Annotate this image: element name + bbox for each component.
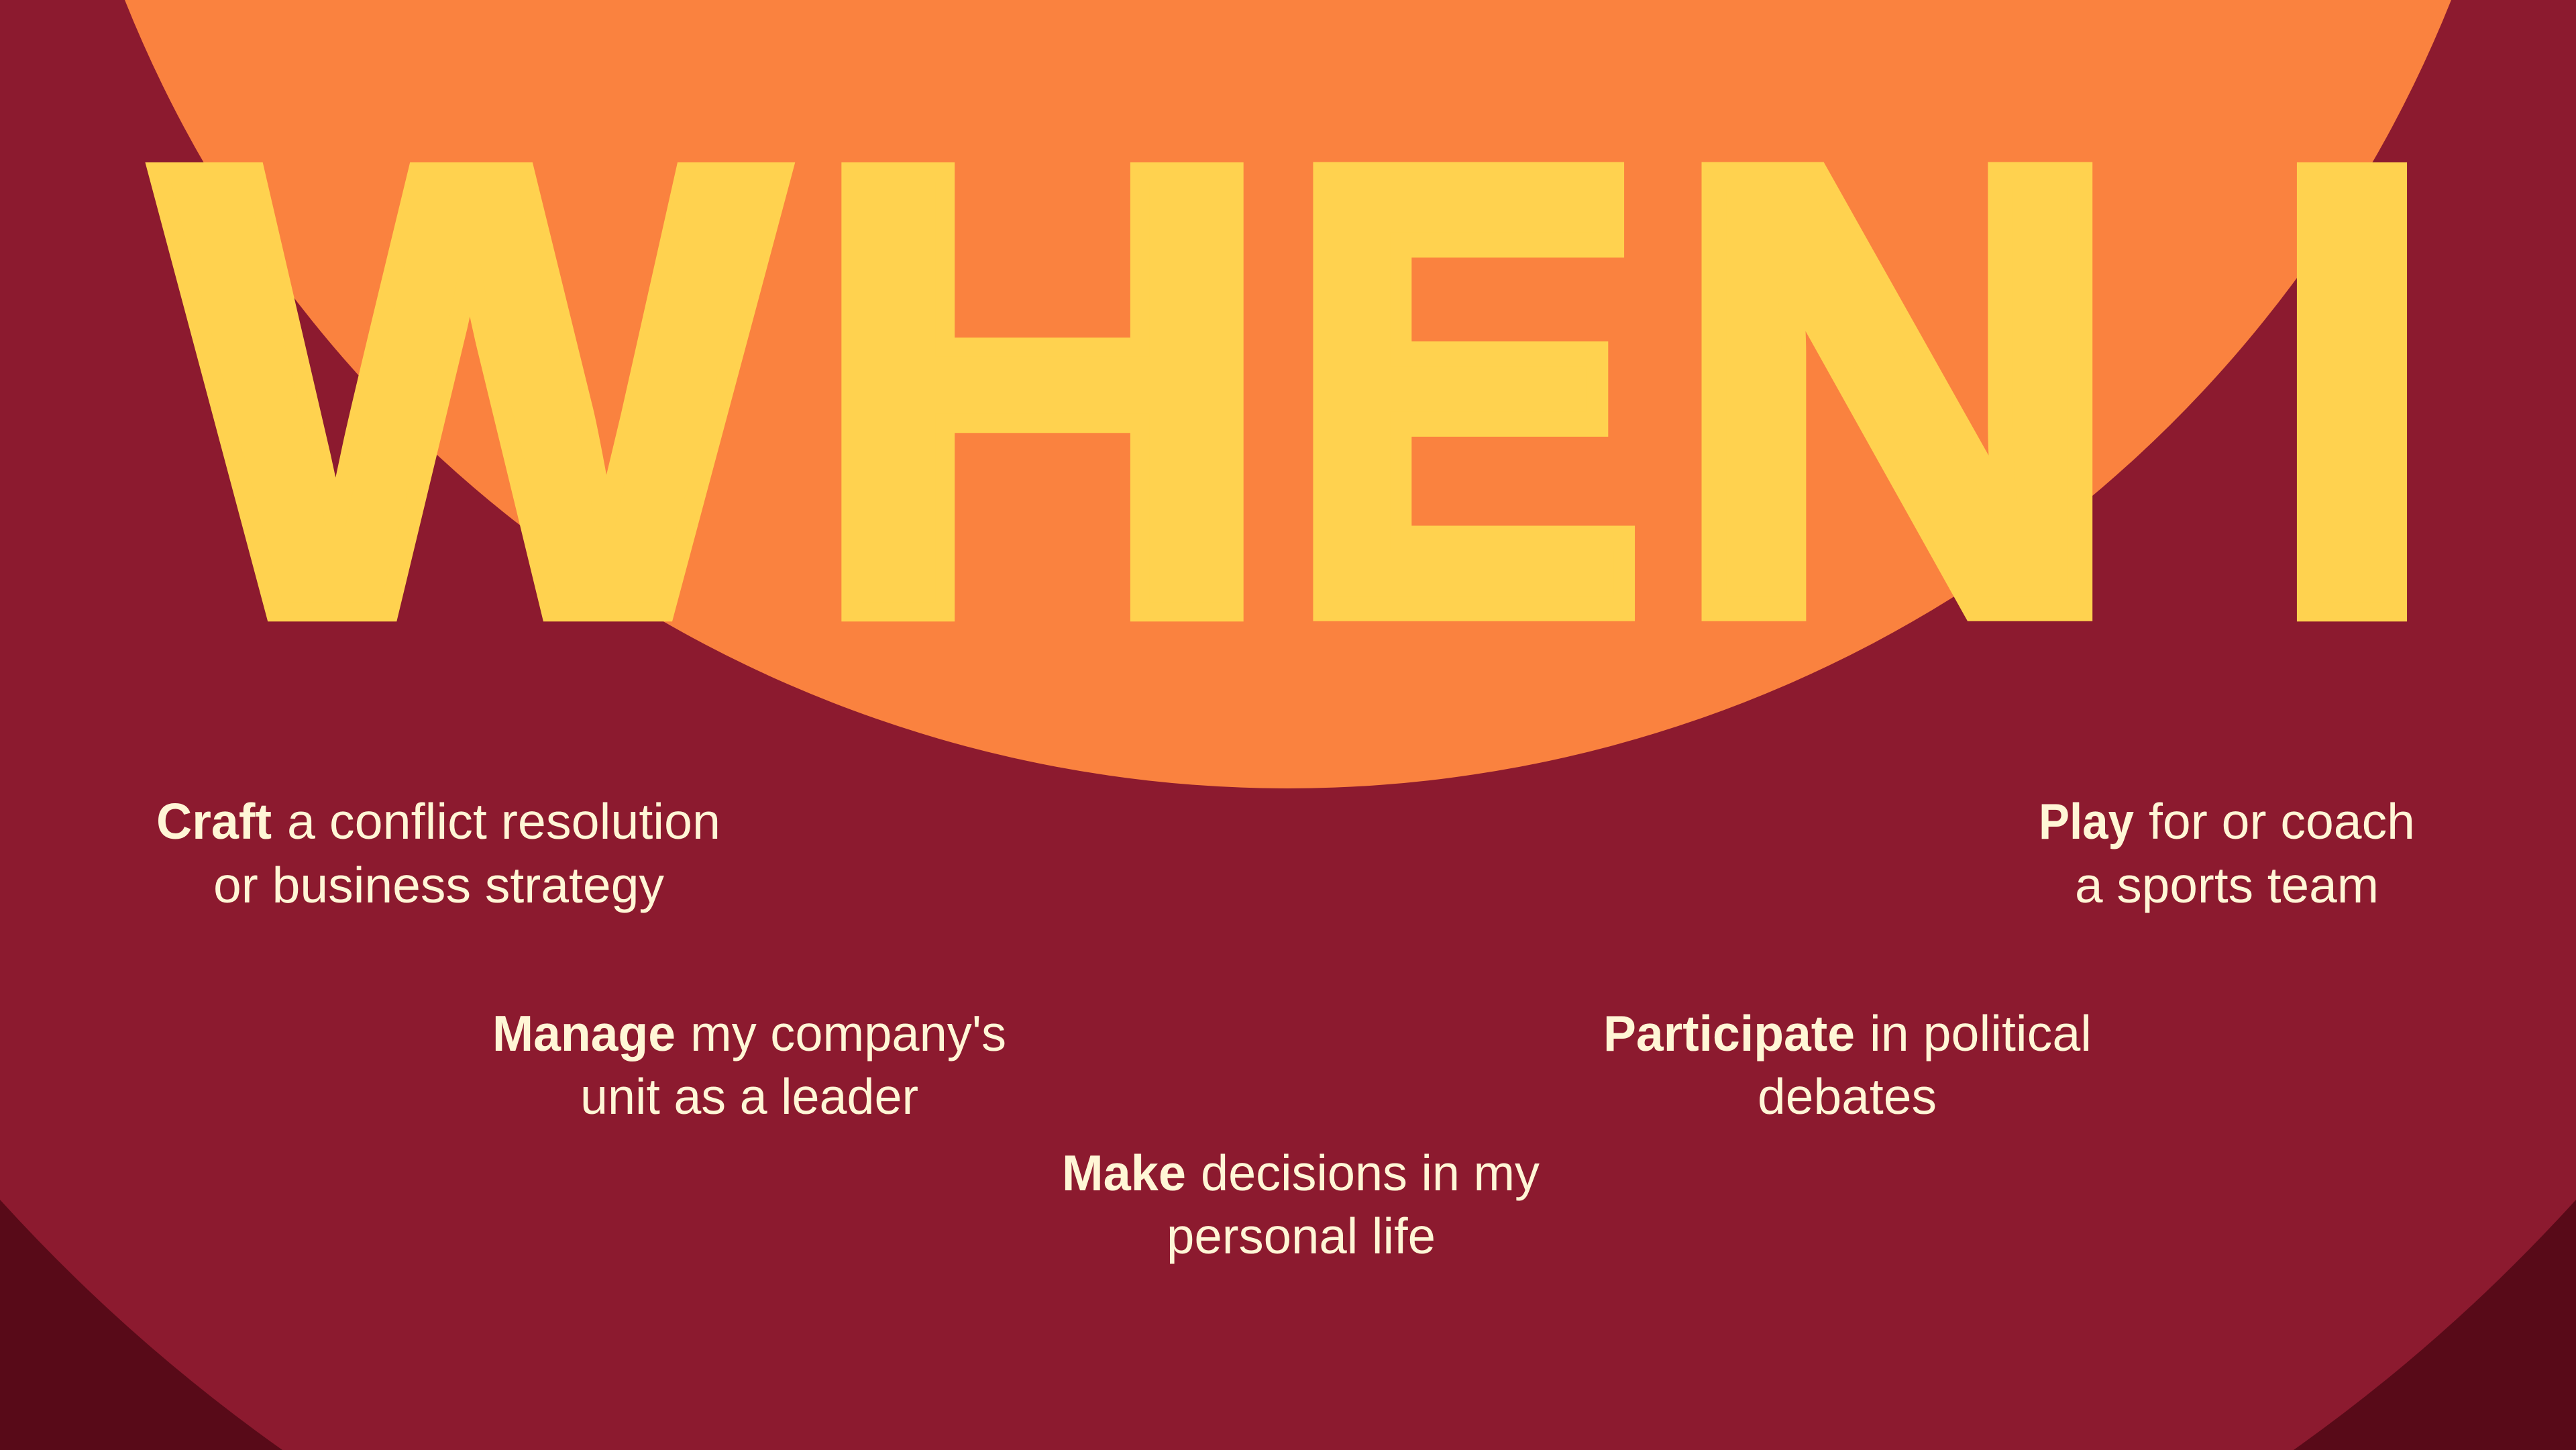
- text block: make decisions: Make: [1062, 1145, 1186, 1201]
- text block: make decisions: [1062, 1145, 1540, 1264]
- title letter H: H: [808, 34, 1278, 747]
- title letter I: I: [2264, 33, 2440, 747]
- background: dark bottom-right corner: [2294, 1200, 2576, 1450]
- title letter W: W: [158, 33, 789, 747]
- text block: participate in debates: in political: [1870, 1005, 2092, 1061]
- title letter E: E: [1288, 38, 1645, 742]
- text block: participate in debates: [1603, 1005, 2092, 1125]
- text block: manage a unit: [492, 1005, 1006, 1125]
- title letter N: N: [1672, 38, 2122, 742]
- text block: craft a strategy: a conflict resolution: [287, 793, 720, 849]
- background: dark bottom-left corner: [0, 1200, 282, 1450]
- text block: craft a strategy: [156, 793, 720, 913]
- text block: play or coach: for or coach: [2149, 793, 2415, 849]
- text block: craft a strategy: Craft: [156, 793, 272, 849]
- text block: make decisions: personal life: [1167, 1208, 1436, 1264]
- text block: play or coach: a sports team: [2075, 857, 2379, 913]
- text block: play or coach: Play: [2039, 793, 2134, 849]
- text block: participate in debates: debates: [1758, 1068, 1937, 1125]
- orange sun circle: [125, 0, 2451, 788]
- text block: play or coach: [2039, 793, 2415, 913]
- text block: manage a unit: unit as a leader: [580, 1068, 918, 1125]
- text block: make decisions: decisions in my: [1201, 1145, 1540, 1201]
- text block: participate in debates: Participate: [1603, 1005, 1855, 1061]
- title: WHEN I: [158, 33, 2440, 747]
- text block: manage a unit: my company's: [690, 1005, 1006, 1061]
- text block: craft a strategy: or business strategy: [213, 857, 664, 913]
- text block: manage a unit: Manage: [492, 1005, 676, 1061]
